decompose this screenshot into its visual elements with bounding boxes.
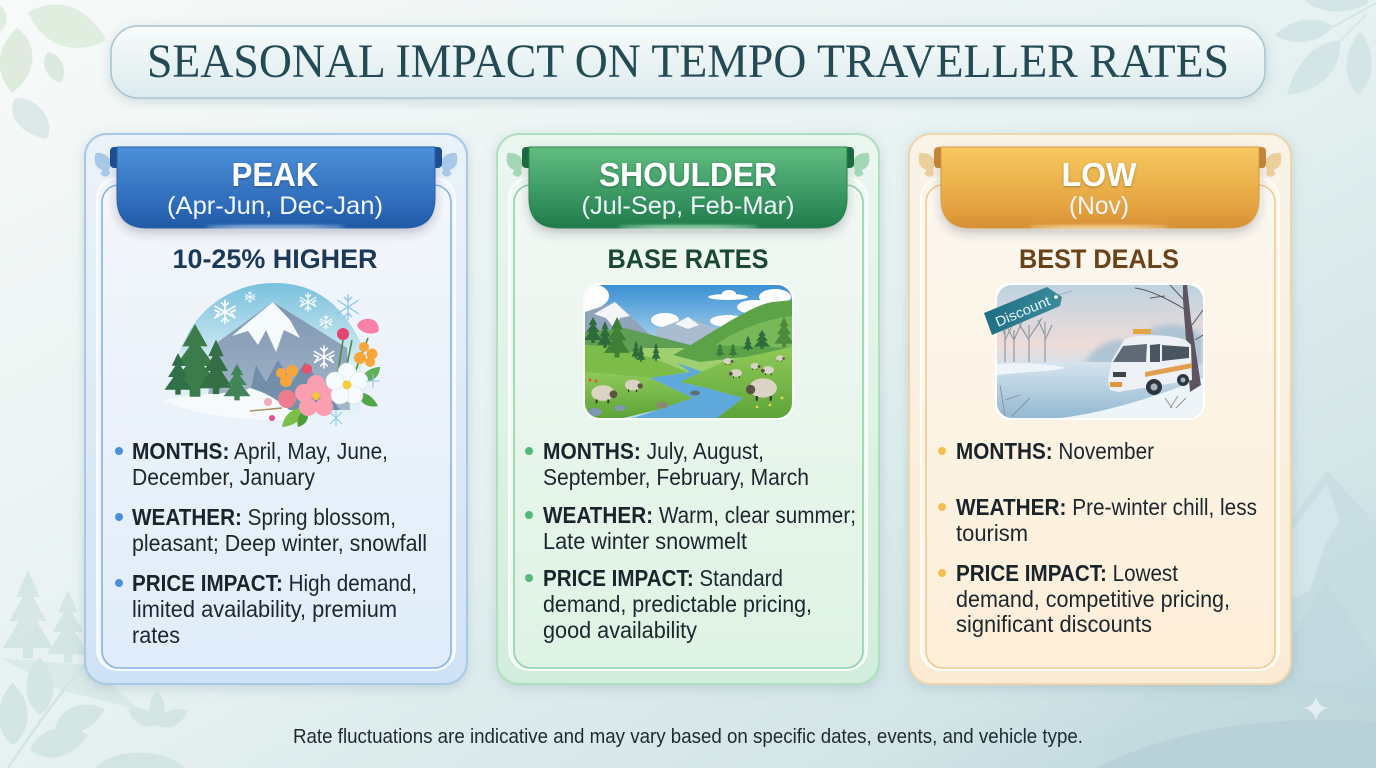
bullet list: peak — [115, 438, 427, 648]
bullet list: shoulder — [525, 438, 856, 643]
discount tag: Discount — [993, 292, 1053, 330]
ribbon header: low: LOW — [1062, 156, 1137, 193]
ribbon header: low — [934, 147, 1266, 228]
bullet list: shoulder: Late winter snowmelt — [543, 528, 747, 554]
bullet list: low: MONTHS: November — [956, 438, 1154, 464]
bullet list: peak: WEATHER: Spring blossom, — [132, 504, 396, 530]
bullet list: peak: limited availability, premium — [132, 596, 397, 622]
ribbon header: peak — [110, 147, 442, 228]
bullet list: low: demand, competitive pricing, — [956, 586, 1230, 612]
bullet list: low: significant discounts — [956, 611, 1152, 637]
bullet list: low: WEATHER: Pre-winter chill, less — [956, 494, 1257, 520]
illustration: green valley with stream and sheep — [575, 283, 794, 420]
bullet list: low: tourism — [956, 520, 1028, 546]
rate heading: low: BEST DEALS — [1019, 244, 1179, 274]
ribbon header: peak: PEAK — [232, 156, 319, 193]
bullet list: peak: PRICE IMPACT: High demand, — [132, 570, 417, 596]
ribbon header: low: (Nov) — [1069, 192, 1129, 220]
title banner — [111, 26, 1265, 98]
ribbon header: shoulder — [522, 147, 854, 228]
discount tag — [984, 287, 1072, 335]
bullet list: peak: rates — [132, 622, 180, 648]
bullet list: peak: December, January — [132, 464, 315, 490]
bullet list: shoulder: demand, predictable pricing, — [543, 591, 812, 617]
bullet list: shoulder: September, February, March — [543, 464, 809, 490]
icon: corner leaves — [914, 148, 1286, 178]
ribbon header: shoulder: (Jul-Sep, Feb-Mar) — [582, 192, 794, 220]
title text: SEASONAL IMPACT ON TEMPO TRAVELLER RATES — [147, 35, 1229, 88]
rate heading: shoulder: BASE RATES — [608, 244, 768, 274]
panel: peak season — [85, 134, 467, 684]
icon: blue snowflake — [337, 294, 359, 320]
panel: shoulder season — [497, 134, 879, 684]
illustration: snowy lake with van and discount tag — [984, 283, 1205, 420]
bullet list: low — [938, 438, 1257, 637]
van — [1108, 329, 1192, 395]
ribbon header: peak: (Apr-Jun, Dec-Jan) — [167, 192, 383, 220]
decoration: top-left leaves — [0, 4, 106, 139]
decoration: bottom-right mountain and trees — [1096, 470, 1376, 768]
bullet list: low: PRICE IMPACT: Lowest — [956, 560, 1178, 586]
bullet list: shoulder: WEATHER: Warm, clear summer; — [543, 502, 856, 528]
decoration: top-right leaves — [1275, 0, 1376, 95]
bullet list: shoulder: PRICE IMPACT: Standard — [543, 565, 783, 591]
rate heading: peak: 10-25% HIGHER — [172, 244, 378, 274]
icon: corner leaves — [502, 148, 874, 178]
bullet list: peak: pleasant; Deep winter, snowfall — [132, 530, 427, 556]
decoration: bottom-left trees and leaves — [0, 570, 191, 768]
bullet list: peak: MONTHS: April, May, June, — [132, 438, 388, 464]
bullet list: shoulder: good availability — [543, 617, 697, 643]
illustration: mountain with snow and flowers — [163, 283, 380, 428]
icon: corner leaves — [90, 148, 462, 178]
footer note: Rate fluctuations are indicative and may vary based on specific dates, events, and vehicle type. — [293, 725, 1083, 748]
panel: low season — [909, 134, 1291, 684]
ribbon header: shoulder: SHOULDER — [599, 156, 777, 193]
bullet list: shoulder: MONTHS: July, August, — [543, 438, 764, 464]
